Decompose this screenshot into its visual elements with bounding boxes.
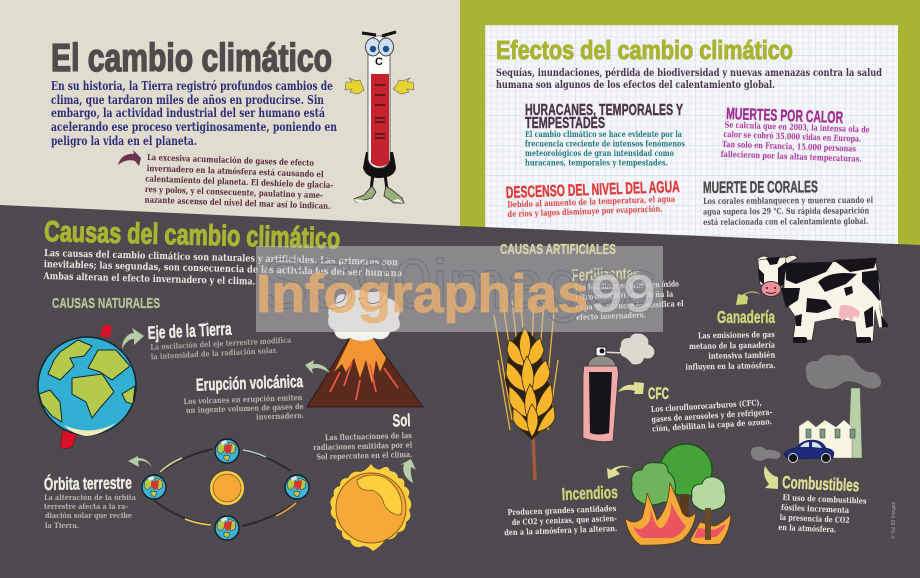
text: volcanic eruption: Erupción volcánica [196, 371, 303, 395]
effect: coral death: está relacionada con el calentamiento global. [703, 216, 868, 227]
panel: grid paper [485, 25, 898, 247]
effect: heat deaths: calor se cobró 35.000 vidas en Europa. [723, 129, 862, 144]
text block: intro [51, 79, 337, 148]
icon: volcano [307, 290, 423, 407]
arrow: CFC [618, 382, 644, 394]
icon: wheat [494, 298, 558, 480]
text: livestock: intensiva también [708, 349, 775, 361]
text: fuels: la presencia de CO2 [780, 512, 850, 525]
effect: falling water level [506, 178, 681, 219]
text: CFC [648, 384, 773, 433]
icon: globe [38, 325, 136, 448]
heading: causes: Causas del cambio climático [44, 216, 341, 255]
icon: thermometer character: C [375, 56, 383, 68]
effect: falling water level: Debido al aumento de la temperatura, el agua [507, 194, 676, 209]
panel: beige intro background [0, 0, 460, 230]
effect: falling water level: de ríos y lagos disminuye por evaporación. [507, 204, 663, 219]
text: fires: den a la atmósfera y la alteran. [504, 523, 618, 537]
label: artificial causes: CAUSAS ARTIFICIALES [500, 242, 616, 258]
text: fuels: fósiles incrementa [781, 502, 849, 515]
text block: greenhouse note: calentamiento del planeta. El deshielo de glacia- [145, 173, 334, 190]
icon: sun [330, 464, 411, 551]
text: fertilizers (under watermark): Los fertilizantes producen óxido [575, 278, 680, 292]
arrow: cow [736, 291, 760, 305]
text: volcanic eruption: invernadero. [256, 411, 304, 422]
text: sun: radiaciones emitidas por el [313, 440, 412, 452]
effect: heat deaths: fallecieron por las altas temperaturas. [721, 149, 862, 164]
text: fertilizers (under watermark): efecto invernadero. [576, 310, 646, 322]
text: Earth orbit [44, 471, 136, 530]
effect: coral death: agua supera los 29 °C. Su rápida desaparición [703, 205, 869, 216]
text: volcanic eruption: Los volcanes en erupción emiten [183, 393, 303, 406]
watermark: Infographias [256, 264, 588, 324]
icon: car exhaust [751, 447, 780, 461]
text: sun: Sol [392, 410, 411, 431]
text: livestock [685, 307, 776, 372]
effect: coral death: Los corales emblanquecen y mueren cuando el [703, 195, 873, 206]
panel: green effects background [460, 0, 920, 250]
arrow: orbit [128, 456, 152, 467]
credit: © Sol 90 Images [890, 502, 897, 539]
text block: intro: clima, que tardaron miles de años en producirse. Sin [51, 93, 324, 107]
effect: coral death [703, 178, 873, 227]
text: Earth orbit: La alteración de la órbita [44, 493, 136, 502]
text: Earth orbit: terrestre afecta a la ra- [44, 502, 128, 511]
text: fires [502, 482, 620, 537]
effect: hurricanes: El cambio climático se hace evidente por la [525, 129, 682, 139]
text block: greenhouse note: nazante ascenso del nivel del mar así lo indican. [144, 194, 331, 211]
effect: heat deaths: Tan solo en Francia, 15.000 personas [722, 139, 856, 154]
text block: greenhouse note: invernadero en la atmósfera está causando el [147, 163, 324, 179]
text: CFC: ción, debilitan la capa de ozono. [652, 416, 772, 433]
effect: hurricanes: HURACANES, TEMPORALES Y [525, 102, 683, 119]
text: livestock: metano de la ganadería [689, 340, 775, 351]
effect: heat deaths [721, 105, 870, 164]
text: Earth orbit: la Tierra. [45, 521, 79, 530]
text block: intro: En su historia, la Tierra registró profundos cambios de [51, 79, 333, 93]
arrow: volcano [305, 360, 330, 374]
watermark: SS90images [262, 245, 657, 323]
text block: greenhouse note: res y polos, y el consecuente, paulatino y ame- [145, 184, 323, 200]
text: livestock: influyen en la atmósfera. [685, 360, 776, 372]
text: fertilizers (under watermark): Fertilizantes [571, 264, 640, 285]
text: fires: de CO2 y cenizas, que ascien- [512, 513, 617, 527]
text block: causes intro: Las causas del cambio climático son naturales y artificiales. Las primeras son [44, 248, 398, 268]
label: natural causes: CAUSAS NATURALES [52, 296, 160, 312]
text block: causes intro [42, 248, 405, 291]
text: sun [312, 410, 413, 462]
arrow: intro note [118, 150, 141, 166]
text: livestock: Las emisiones de gas [698, 329, 775, 340]
effect: hurricanes: TEMPESTADES [525, 115, 605, 132]
text block: causes intro: inevitables; las segundas, son consecuencia de las actividades del ser humano. [44, 259, 405, 279]
text: sun: Sol repercuten en el clima. [316, 450, 413, 462]
text: fertilizers (under watermark) [571, 262, 684, 322]
arrow: axis [122, 328, 144, 349]
text: CFC: gases de aerosoles y de refrigera- [651, 407, 773, 424]
diagram: orbit [142, 439, 309, 540]
icon: factory smoke [806, 355, 881, 389]
text block: intro: embargo, la actividad industrial del ser humano está [51, 106, 325, 120]
icon: spray cloud [620, 334, 654, 364]
text: CFC: Los clorofluorocarburos (CFC), [651, 397, 762, 414]
text block: greenhouse note [144, 152, 335, 211]
text: axis of the Earth: la intensidad de la radiación solar. [151, 346, 278, 361]
text: CFC: CFC [648, 384, 669, 403]
icon: cow [756, 255, 888, 343]
text: fires: Producen grandes cantidades [507, 503, 617, 517]
effect: hurricanes: frecuencia creciente de intensos fenómenos [525, 138, 685, 148]
text block: causes intro: Ambas alteran el efecto invernadero y el clima. [42, 271, 256, 288]
text: fuels: en la atmósfera. [778, 522, 837, 534]
effect: hurricanes: huracanes, temporales y tempestades. [525, 158, 668, 168]
heading: effects: Efectos del cambio climático [496, 37, 793, 65]
icon: car [784, 440, 834, 462]
text: fuels: Combustibles [782, 472, 860, 495]
effect: falling water level: DESCENSO DEL NIVEL DEL AGUA [506, 178, 680, 202]
watermark: 99 [590, 264, 656, 324]
text block: intro: peligro la vida en el planeta. [51, 134, 197, 148]
icon: thermometer character [345, 32, 414, 203]
effect: heat deaths: MUERTES POR CALOR [726, 105, 843, 127]
text: fertilizers (under watermark): capa de ozono e intensifica el [575, 298, 684, 312]
text: axis of the Earth [147, 316, 292, 361]
panel: dark causes background [0, 205, 920, 578]
arrow: fuels [764, 466, 778, 489]
effect: coral death: MUERTE DE CORALES [703, 178, 818, 197]
text: fertilizers (under watermark): nitroso (N2O), que daña la [575, 289, 673, 302]
text block: effects intro: humana son algunos de los efectos del calentamiento global. [496, 80, 775, 91]
icon: factory [799, 388, 862, 458]
text: axis of the Earth: Eje de la Tierra [147, 319, 233, 343]
text: fuels [778, 472, 868, 536]
text: axis of the Earth: La oscilación del eje terrestre modifica [150, 336, 291, 352]
text: Earth orbit: Órbita terrestre [44, 471, 132, 494]
icon: forest fire [625, 444, 731, 545]
text block: effects intro [496, 68, 882, 91]
text: fuels: El uso de combustibles [782, 492, 867, 506]
title: El cambio climático [51, 37, 332, 80]
arrow: fires [607, 466, 633, 479]
text block: intro: acelerando ese proceso vertiginosamente, poniendo en [51, 120, 337, 134]
effect: hurricanes [525, 102, 685, 168]
text: livestock: Ganadería [717, 307, 775, 327]
icon: spray can [583, 347, 625, 442]
text: sun: Las fluctuaciones de las [325, 431, 412, 442]
text: fires: Incendios [561, 482, 618, 504]
arrow: sun [400, 459, 416, 483]
text: volcanic eruption [183, 371, 304, 424]
effect: hurricanes: meteorológicos de gran intensidad como [525, 148, 674, 158]
text: Earth orbit: diación solar que recibe [45, 511, 132, 520]
text block: greenhouse note: La excesiva acumulación de gases de efecto [147, 152, 314, 168]
effect: heat deaths: Se calcula que en 2003, la intensa ola de [725, 119, 870, 135]
text: volcanic eruption: un ingente volumen de gases de [186, 402, 304, 415]
